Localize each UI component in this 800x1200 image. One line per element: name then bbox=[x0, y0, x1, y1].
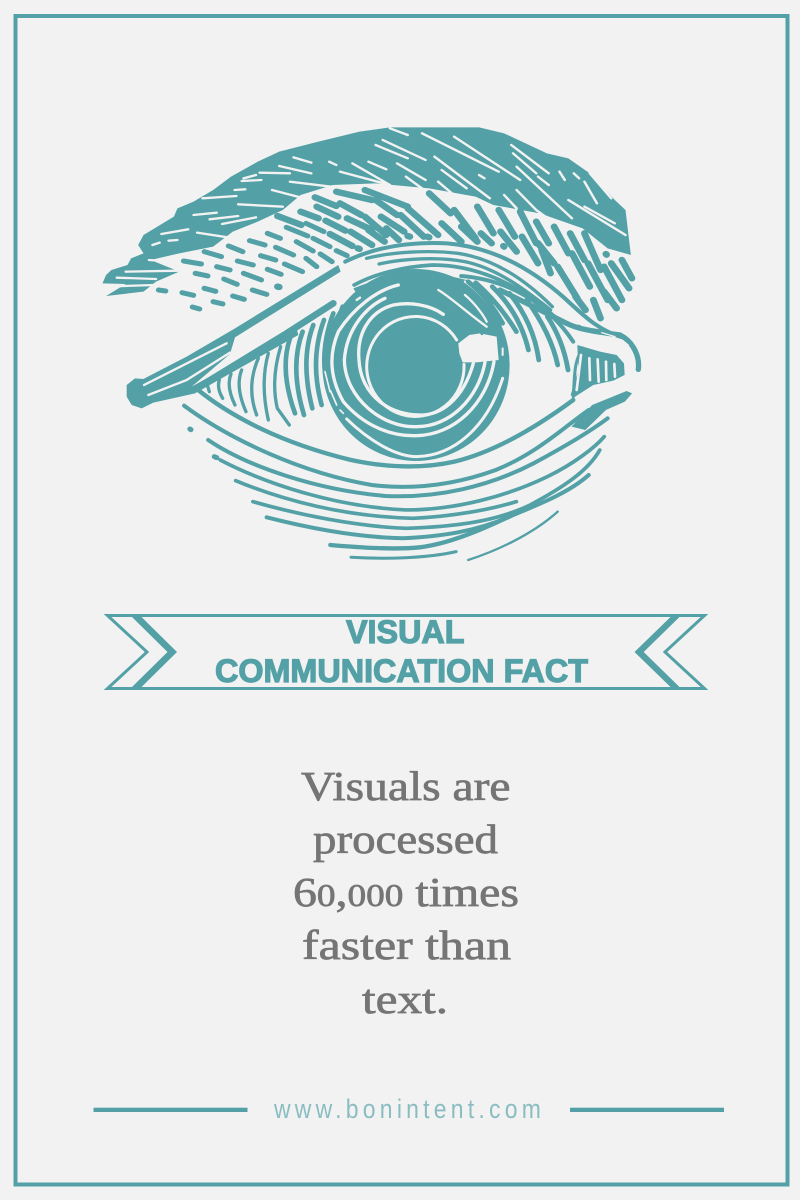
sclera hatching right bbox=[461, 276, 573, 370]
left rule bbox=[94, 1108, 248, 1112]
sclera hatching left bbox=[195, 303, 343, 425]
right rule bbox=[570, 1108, 724, 1112]
banner outline bbox=[108, 616, 704, 688]
upper lid contour lines bbox=[345, 243, 626, 338]
right chevron bbox=[634, 617, 680, 687]
fact text: faster than bbox=[302, 922, 511, 968]
banner heading: VISUAL bbox=[346, 614, 464, 650]
website url: www.bonintent.com bbox=[273, 1094, 541, 1124]
fact text: text. bbox=[362, 976, 448, 1022]
left chevron bbox=[132, 617, 177, 687]
banner heading bbox=[215, 614, 588, 689]
iris and pupil bbox=[322, 269, 517, 461]
fact text: 60,000 times bbox=[293, 869, 519, 915]
icon: engraved eye illustration bbox=[102, 127, 639, 560]
fact text: processed bbox=[313, 816, 498, 862]
eyebrow bbox=[102, 127, 632, 318]
fact text bbox=[293, 763, 519, 1022]
banner ribbon bbox=[108, 614, 704, 689]
banner heading: COMMUNICATION FACT bbox=[215, 653, 588, 689]
lower lid folds bbox=[184, 391, 632, 560]
fact text: Visuals are bbox=[301, 763, 510, 809]
lid and tail band bbox=[127, 265, 341, 408]
lower lid line bbox=[196, 348, 584, 467]
tear duct bbox=[500, 290, 639, 397]
footer website line bbox=[94, 1094, 724, 1124]
